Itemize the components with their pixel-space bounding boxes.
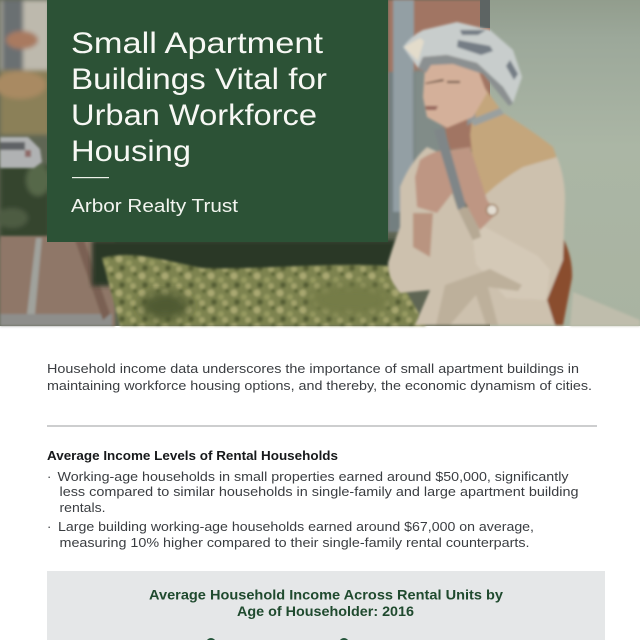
coat: [388, 147, 565, 325]
title: Urban Workforce: [71, 99, 317, 132]
section: average income levels: [47, 448, 578, 550]
photo background: parked car: [0, 137, 42, 168]
bullet 1: Working-age households in small properties earned around $50,000, significantly: [58, 469, 569, 484]
chart title: Average Household Income Across Rental Units by: [149, 586, 503, 602]
bullet 2: [47, 519, 534, 550]
bullet 1: [47, 469, 578, 515]
author: Arbor Realty Trust: [71, 195, 238, 216]
legend marker: right: [339, 638, 349, 640]
legend marker: left: [206, 638, 216, 640]
bullet 2: ·: [47, 519, 51, 534]
photo background: hedges: [92, 240, 426, 326]
title: [71, 27, 327, 168]
section heading: Average Income Levels of Rental Households: [47, 448, 338, 463]
photo background: left building and trees: [0, 0, 50, 240]
intro paragraph: [47, 361, 592, 393]
bullet 2: Large building working-age households earned around $67,000 on average,: [58, 519, 534, 534]
chin strap: [434, 128, 466, 210]
watch: [486, 204, 498, 216]
hero photo: woman fastening a cycling helmet on a city street: [0, 0, 640, 326]
photo background: brick pavement: [0, 236, 115, 326]
photo background: brick wall, drainpipe and green wall: [388, 0, 640, 326]
intro paragraph: Household income data underscores the importance of small apartment buildings in: [47, 361, 579, 376]
face: [423, 57, 487, 128]
forearms and hands: [413, 213, 433, 257]
title: Housing: [71, 135, 191, 168]
hair: [470, 77, 560, 230]
chart title: Age of Householder: 2016: [237, 603, 414, 619]
chart panel: [47, 571, 605, 640]
title: Buildings Vital for: [71, 63, 327, 96]
bullet 1: rentals.: [60, 500, 106, 515]
bag: [545, 238, 572, 325]
bullet 1: less compared to similar households in single-family and large apartment building: [60, 484, 578, 499]
bullet 2: measuring 10% higher compared to their single-family rental counterparts.: [60, 535, 530, 550]
title panel: [47, 0, 388, 242]
bullet 1: ·: [47, 469, 51, 484]
helmet: [403, 22, 522, 103]
chart title: [149, 586, 503, 619]
title: Small Apartment: [71, 27, 324, 60]
intro paragraph: maintaining workforce housing options, and thereby, the economic dynamism of cities.: [47, 378, 592, 393]
photo subject: woman with helmet: [388, 22, 572, 325]
